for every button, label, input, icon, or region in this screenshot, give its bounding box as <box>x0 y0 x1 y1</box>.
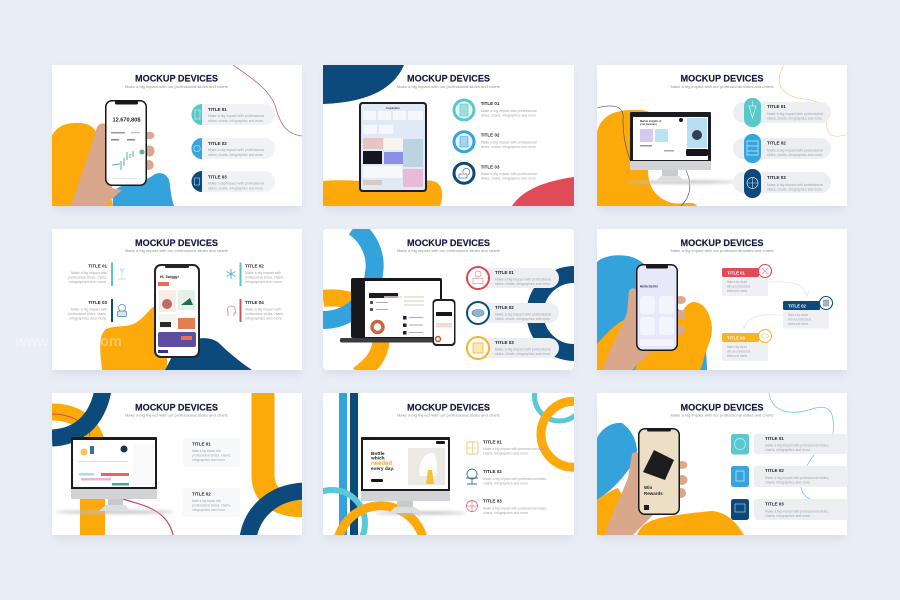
icon: phone shopping app mockup <box>154 264 200 358</box>
panel: slide 8 desktop with rings <box>323 393 574 540</box>
item: title 01 <box>733 98 831 127</box>
item: title 01: infographics and more. <box>69 280 107 284</box>
item: title 02: TITLE 02 <box>481 133 500 138</box>
item: title 01: slides, charts, infographics and more. <box>208 119 264 123</box>
icon: laptop and phone mockup <box>340 278 456 346</box>
item: title 02: charts, infographics and more. <box>483 482 529 486</box>
item: title 01: Make a big impact with professional slides, <box>765 444 829 448</box>
item: title 03: TITLE 03 <box>495 340 514 345</box>
item: title 01: professional slides, charts, <box>68 276 107 280</box>
item: title 01: slides, charts, infographics and more. <box>767 117 823 121</box>
icon: desktop monitor mockup <box>361 437 465 514</box>
subtitle: slide 9: Make a big impact with our professional slides and charts <box>670 412 774 418</box>
item: title 03 <box>733 169 831 198</box>
item: title 02 <box>226 262 284 286</box>
item: title 02: Make a big impact with professional <box>208 148 264 152</box>
panel: slide 1 phone with trading app <box>52 65 302 210</box>
item: title 01: TITLE 01 <box>481 101 500 106</box>
item: title 02: TITLE 02 <box>483 469 502 474</box>
card: title 02: TITLE 02 <box>192 492 211 496</box>
card: title 02 <box>183 488 240 517</box>
item: title 03: Make a big impact with professional slides, <box>765 509 829 513</box>
item: title 01 <box>467 267 559 289</box>
item: title 02: Make a big impact with professional slides, <box>765 476 829 480</box>
item: title 04: TITLE 04 <box>245 300 264 305</box>
panel: slide 2 tablet <box>323 65 574 210</box>
arrow: title 02 to title 03 <box>742 315 783 329</box>
heading: slide 5: MOCKUP DEVICES <box>407 238 491 249</box>
icon: hand holding phone: 12.670,80$ <box>112 118 141 124</box>
item: title 03 <box>467 337 559 359</box>
watermark: left margin: www <box>14 334 50 350</box>
item: title 03: Make a big impact with professional <box>208 182 264 186</box>
card: title 02: Make a big impact <box>788 313 808 317</box>
card: title 03 <box>722 330 772 361</box>
heading: slide 9: MOCKUP DEVICES <box>680 402 764 413</box>
card: title 02: Make a big impact with <box>192 499 221 503</box>
item: title 03: Make a big impact with <box>71 308 107 312</box>
item: title 03 <box>191 171 275 192</box>
panel: slide 9 phone with rewards <box>597 393 848 539</box>
item: title 02: TITLE 02 <box>208 141 227 146</box>
item: title 01 <box>731 434 848 454</box>
subtitle: slide 4: Make a big impact with our professional slides and charts <box>125 248 228 253</box>
heading: slide 2: MOCKUP DEVICES <box>407 74 491 85</box>
card: title 02: TITLE 02 <box>788 303 807 308</box>
panel: slide 6 phone with flow <box>597 229 847 374</box>
item: title 01: TITLE 01 <box>765 436 784 441</box>
item: title 04 <box>227 299 284 322</box>
item: title 03 <box>454 163 537 183</box>
heading: slide 7: MOCKUP DEVICES <box>135 402 219 413</box>
icon: hand holding phone <box>605 428 688 535</box>
item: title 01: Make a big impact with professional <box>767 112 823 116</box>
icon: phone shopping app mockup: Hi, Swiggy! <box>160 275 179 279</box>
item: title 02: professional slides, charts, <box>245 276 284 280</box>
item: title 04: professional slides, charts, <box>245 312 284 316</box>
item: title 02 <box>731 466 848 487</box>
subtitle: slide 6: Make a big impact with our professional slides and charts <box>670 248 774 253</box>
item: title 03: slides, charts, infographics and more. <box>767 188 823 192</box>
icon: desktop monitor mockup: your business <box>640 123 658 126</box>
item: title 04: Make a big impact with <box>245 308 281 312</box>
item: title 02: TITLE 02 <box>495 305 514 310</box>
heading: slide 3: MOCKUP DEVICES <box>680 74 764 85</box>
card: title 03: TITLE 03 <box>727 335 746 340</box>
item: title 03: Make a big impact with professional slides, <box>483 506 547 510</box>
heading: slide 6: MOCKUP DEVICES <box>680 238 764 249</box>
icon: tablet mockup <box>359 102 427 192</box>
icon: tablet mockup: Inspiration <box>386 106 400 110</box>
panel: slide 3 desktop monitor <box>597 65 847 210</box>
card: title 02: infographics and more. <box>192 508 226 512</box>
card: title 03: Make a big impact <box>727 345 747 349</box>
item: title 03: Make a big impact with professional <box>481 172 537 176</box>
item: title 03: slides, charts, infographics and more. <box>208 186 264 190</box>
icon: desktop monitor mockup: which <box>370 456 385 462</box>
card: title 01: infographics and more. <box>192 458 226 462</box>
subtitle: slide 5: Make a big impact with our professional slides and charts <box>397 248 500 253</box>
panel: slide 4 phone with four titles <box>52 229 302 374</box>
card: title 02: slides and charts <box>788 322 808 326</box>
item: title 03: TITLE 03 <box>483 498 502 504</box>
card: title 01: TITLE 01 <box>192 442 211 446</box>
card: title 02: professional slides, charts, <box>192 504 231 508</box>
item: title 03: TITLE 03 <box>767 175 786 180</box>
item: title 02 <box>467 302 559 324</box>
item: title 03: charts, infographics and more. <box>483 511 529 515</box>
item: title 03: Make a big impact with professional <box>767 183 823 187</box>
item: title 03: Make a big impact with professional <box>495 348 551 352</box>
item: title 02: Make a big impact with <box>245 271 281 275</box>
icon: desktop monitor mockup: every day. <box>371 466 394 472</box>
item: title 01: charts, infographics and more. <box>483 452 529 456</box>
card: title 01: professional slides, charts, <box>192 454 231 458</box>
item: title 02: slides, charts, infographics and more. <box>481 145 537 149</box>
item: title 02: infographics and more. <box>245 280 283 284</box>
item: title 01: TITLE 01 <box>88 264 107 268</box>
item: title 01 <box>68 262 126 286</box>
item: title 02: slides, charts, infographics and more. <box>208 153 264 157</box>
subtitle: slide 2: Make a big impact with our professional slides and charts <box>397 84 500 89</box>
card: title 01 <box>722 264 772 296</box>
icon: desktop monitor mockup <box>55 437 175 514</box>
icon: hand holding phone: Hello Derin! <box>640 284 658 288</box>
icon: hand holding phone <box>602 264 686 370</box>
item: title 01: Make a big impact with professional <box>495 278 551 282</box>
subtitle: slide 8: Make a big impact with our professional slides and charts <box>397 412 500 418</box>
card: title 01: with our professional <box>727 285 750 289</box>
item: title 03: TITLE 03 <box>208 174 227 180</box>
item: title 02: Make a big impact with professional <box>767 148 823 152</box>
item: title 03 <box>68 299 126 322</box>
card: title 01 <box>183 438 240 467</box>
item: title 02: TITLE 02 <box>245 264 264 268</box>
item: title 03: TITLE 03 <box>88 300 107 305</box>
item: title 01: Make a big impact with <box>71 271 107 275</box>
card: title 03: slides and charts <box>727 354 747 358</box>
icon: hand holding phone <box>71 100 154 206</box>
card: title 01: Make a big impact <box>727 280 747 284</box>
card: title 02 <box>783 296 832 328</box>
item: title 02: Make a big impact with professional <box>495 312 551 316</box>
arrow: title 01 to title 02 <box>768 282 809 296</box>
item: title 02: slides, charts, infographics and more. <box>495 317 551 321</box>
card: title 01: slides and charts <box>727 289 747 293</box>
icon: hand holding phone: Win <box>644 485 652 490</box>
item: title 02 <box>191 138 275 159</box>
card: title 02: with our professional <box>788 318 811 322</box>
item: title 01 <box>454 100 537 120</box>
icon: desktop monitor mockup: Bottle <box>371 451 385 457</box>
subtitle: slide 7: Make a big impact with our professional slides and charts <box>125 412 228 418</box>
subtitle: slide 3: Make a big impact with our professional slides and charts <box>670 84 774 89</box>
item: title 02: TITLE 02 <box>767 141 786 146</box>
item: title 01: TITLE 01 <box>495 270 514 275</box>
panel: slide 5 laptop and phone <box>323 229 574 374</box>
item: title 02 <box>733 134 831 163</box>
icon: desktop monitor mockup <box>625 112 735 184</box>
item: title 02: slides, charts, infographics and more. <box>767 153 823 157</box>
item: title 01 <box>191 104 275 125</box>
panel: slide 7 desktop with two titles <box>52 390 305 539</box>
icon: hand holding phone: Rewards <box>644 491 663 496</box>
item: title 03: charts, infographics and more. <box>765 514 811 518</box>
item: title 01: Make a big impact with professional <box>481 109 537 113</box>
card: title 01: TITLE 01 <box>727 270 746 275</box>
item: title 02: Make a big impact with professional <box>481 140 537 144</box>
item: title 02: TITLE 02 <box>765 468 784 473</box>
item: title 01: Make a big impact with professional <box>208 114 264 118</box>
item: title 01: TITLE 01 <box>767 104 786 109</box>
heading: slide 4: MOCKUP DEVICES <box>135 238 219 249</box>
item: title 01: slides, charts, infographics and more. <box>481 114 537 118</box>
item: title 02: charts, infographics and more. <box>765 480 811 484</box>
item: title 03: slides, charts, infographics and more. <box>481 177 537 181</box>
item: title 01: charts, infographics and more. <box>765 448 811 452</box>
item: title 02: Make a big impact with professional slides, <box>483 477 547 481</box>
item: title 03: professional slides, charts, <box>68 312 107 316</box>
item: title 04: infographics and more. <box>245 317 283 321</box>
item: title 01: TITLE 01 <box>483 440 502 444</box>
item: title 03 <box>731 499 848 520</box>
item: title 01: TITLE 01 <box>208 107 227 112</box>
card: title 01: Make a big impact with <box>192 449 221 453</box>
icon: desktop monitor mockup: Market insights of <box>640 120 662 123</box>
item: title 01: slides, charts, infographics and more. <box>495 282 551 286</box>
item: title 02 <box>466 469 547 486</box>
heading: slide 1: MOCKUP DEVICES <box>135 74 219 85</box>
item: title 03: infographics and more. <box>69 317 107 321</box>
item: title 03 <box>466 498 547 515</box>
item: title 03: TITLE 03 <box>481 164 500 169</box>
icon: desktop monitor mockup: needed <box>371 461 392 467</box>
subtitle: slide 1: Make a big impact with our professional slides and charts <box>125 84 228 89</box>
item: title 02 <box>454 132 537 152</box>
item: title 03: TITLE 03 <box>765 502 784 506</box>
watermark: om <box>100 334 122 350</box>
item: title 01: Make a big impact with professional slides, <box>483 447 547 451</box>
item: title 03: slides, charts, infographics and more. <box>495 352 551 356</box>
heading: slide 8: MOCKUP DEVICES <box>407 402 491 413</box>
card: title 03: with our professional <box>727 350 750 354</box>
item: title 01 <box>467 440 547 456</box>
